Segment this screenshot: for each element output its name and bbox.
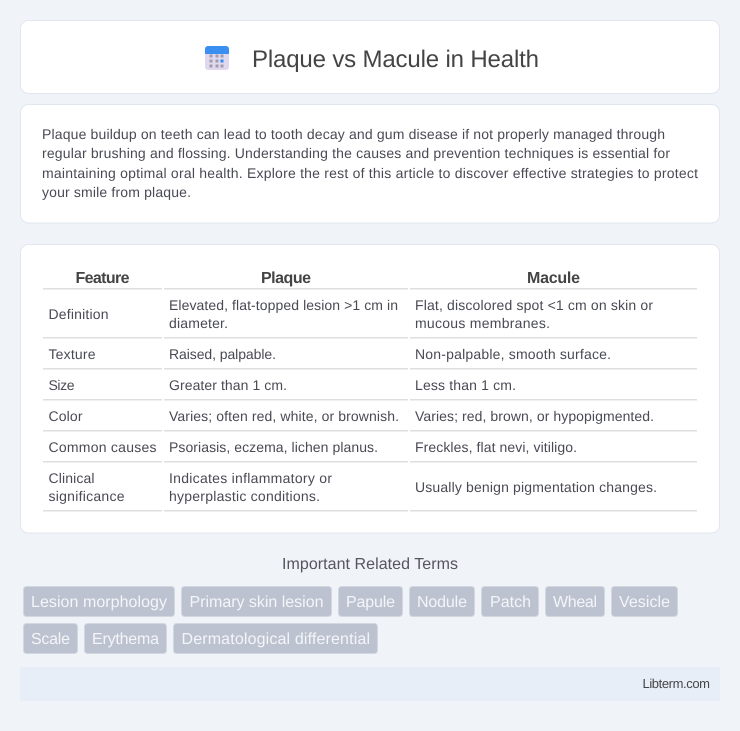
table row: clinical significance (43, 470, 697, 512)
table row: definition (43, 297, 697, 338)
tag: wheal: Wheal (553, 594, 597, 611)
table row: size (43, 377, 697, 400)
tag: papule (338, 586, 402, 616)
table row: texture: Non-palpable, smooth surface. (415, 346, 611, 362)
table row: size: Less than 1 cm. (415, 377, 516, 393)
table row: color: Varies; red, brown, or hypopigmented. (415, 408, 654, 424)
table row: size: Size (48, 377, 75, 393)
table header row (43, 270, 697, 290)
tag: nodule (410, 586, 474, 616)
table row: size: Greater than 1 cm. (169, 377, 287, 393)
table row: clinical significance: Indicates inflammatory or (169, 470, 332, 486)
table row: clinical significance: Clinical (48, 470, 94, 486)
icon: calendar (205, 46, 229, 70)
tag: primary skin lesion (182, 586, 332, 616)
table row: definition: mucous membranes. (415, 315, 550, 331)
table row: definition: Definition (48, 306, 108, 322)
table row: common causes (43, 439, 697, 462)
table row: clinical significance: Usually benign pigmentation changes. (415, 479, 657, 495)
text block: introduction paragraph (42, 126, 698, 200)
tag: lesion morphology (24, 586, 174, 616)
tag: wheal (546, 586, 604, 616)
table row: clinical significance: hyperplastic conditions. (169, 488, 320, 504)
table header row: Plaque (261, 270, 311, 287)
table row: color: Varies; often red, white, or brownish. (169, 408, 399, 424)
panel: comparison table (20, 244, 720, 533)
tag: erythema: Erythema (92, 631, 159, 648)
table row: common causes: Psoriasis, eczema, lichen planus. (169, 439, 378, 455)
table row: texture (43, 346, 697, 370)
tag: papule: Papule (346, 594, 395, 611)
heading: important related terms: Important Related Terms (282, 556, 458, 573)
table row: color (43, 408, 697, 432)
tag: patch: Patch (490, 594, 531, 611)
table header row: Feature (76, 270, 130, 287)
tag: scale (24, 624, 78, 654)
tag: dermatological differential: Dermatological differential (182, 631, 370, 648)
panel: introduction (20, 104, 720, 223)
tag: vesicle: Vesicle (619, 594, 670, 611)
table row: common causes: Freckles, flat nevi, vitiligo. (415, 439, 577, 455)
text block: introduction paragraph: Plaque buildup on teeth can lead to tooth decay and gum disease if not properly managed through (42, 126, 665, 142)
table row: definition: Flat, discolored spot <1 cm on skin or (415, 297, 653, 313)
footer credit: Libterm.com (642, 676, 710, 691)
title: Plaque vs Macule in Health (252, 46, 539, 73)
text block: introduction paragraph: maintaining optimal oral health. Explore the rest of this article to discover effective strategies to protect (42, 165, 698, 181)
tag: dermatological differential (174, 624, 378, 654)
tag: nodule: Nodule (417, 594, 467, 611)
tag list: related terms (24, 586, 678, 654)
tag: erythema (84, 624, 166, 654)
tag: lesion morphology: Lesion morphology (31, 594, 167, 611)
table row: color: Color (48, 408, 83, 424)
text block: introduction paragraph: your smile from plaque. (42, 184, 191, 200)
table row: texture: Raised, palpable. (169, 346, 276, 362)
panel: header (20, 20, 720, 94)
tag: vesicle (612, 586, 678, 616)
table header row: Macule (527, 270, 580, 287)
tag: scale: Scale (31, 631, 70, 648)
table row: texture: Texture (48, 346, 96, 362)
table row: definition: Elevated, flat-topped lesion >1 cm in (169, 297, 398, 313)
text block: introduction paragraph: regular brushing and flossing. Understanding the causes and prevention techniques is essential for (42, 145, 670, 161)
table row: common causes: Common causes (48, 439, 156, 455)
tag: patch (482, 586, 538, 616)
footer (20, 667, 720, 701)
tag: primary skin lesion: Primary skin lesion (190, 594, 324, 611)
table row: clinical significance: significance (48, 488, 125, 504)
table row: definition: diameter. (169, 315, 228, 331)
